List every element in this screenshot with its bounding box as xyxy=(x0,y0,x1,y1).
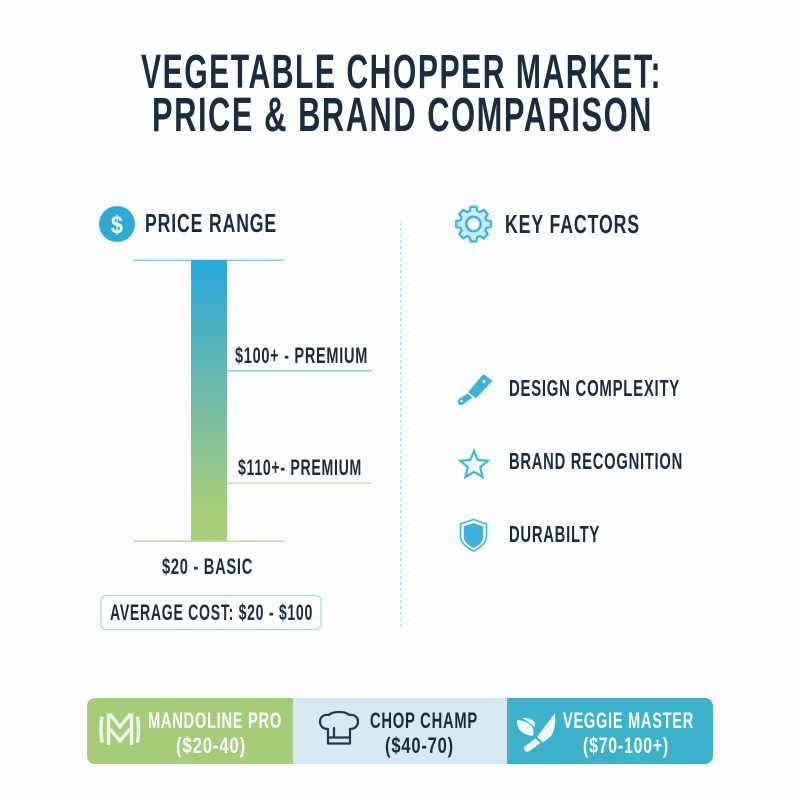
panel: brand strip xyxy=(87,698,713,764)
factor: design complexity xyxy=(458,374,680,405)
bottom tick line xyxy=(133,540,284,542)
brand: chop champ xyxy=(293,698,507,764)
factor: durability xyxy=(460,520,600,551)
factor: brand recognition: BRAND RECOGNITION xyxy=(509,448,683,474)
icon: star xyxy=(460,451,488,477)
icon: dollar coin: $ xyxy=(111,211,123,239)
icon: chef hat xyxy=(320,712,358,744)
factor: durability: DURABILTY xyxy=(509,521,600,547)
top tick line xyxy=(133,260,284,261)
icon: gear xyxy=(456,207,491,241)
brand: veggie master xyxy=(507,698,713,764)
icon: dollar coin xyxy=(99,206,135,242)
heading: key factors: KEY FACTORS xyxy=(505,209,640,239)
brand: chop champ: ($40-70) xyxy=(385,733,454,758)
title xyxy=(141,46,662,142)
brand: chop champ: CHOP CHAMP xyxy=(370,708,478,733)
label: basic tier: $20 - BASIC xyxy=(162,554,253,579)
icon: cleaver xyxy=(458,374,493,405)
icon: shield xyxy=(460,520,486,551)
brand: mandoline pro xyxy=(87,698,293,764)
icon: knife and leaf xyxy=(517,713,555,752)
callout: average cost: AVERAGE COST: $20 - $100 xyxy=(110,600,313,625)
callout: average cost xyxy=(101,596,321,630)
brand: mandoline pro: ($20-40) xyxy=(176,733,246,758)
brand: mandoline pro: MANDOLINE PRO xyxy=(148,708,282,733)
label: upper premium tier: $100+ - PREMIUM xyxy=(235,343,368,368)
icon: M logo xyxy=(101,714,139,745)
brand: veggie master: ($70-100+) xyxy=(583,733,669,758)
label: lower premium tier: $110+- PREMIUM xyxy=(238,455,362,480)
brand: veggie master: VEGGIE MASTER xyxy=(563,708,694,733)
panel: price range xyxy=(99,206,372,630)
price gradient bar xyxy=(191,260,227,541)
factor: brand recognition xyxy=(460,448,683,477)
factor: design complexity: DESIGN COMPLEXITY xyxy=(509,375,680,401)
panel: key factors xyxy=(456,207,683,551)
heading: price range: PRICE RANGE xyxy=(145,208,277,238)
